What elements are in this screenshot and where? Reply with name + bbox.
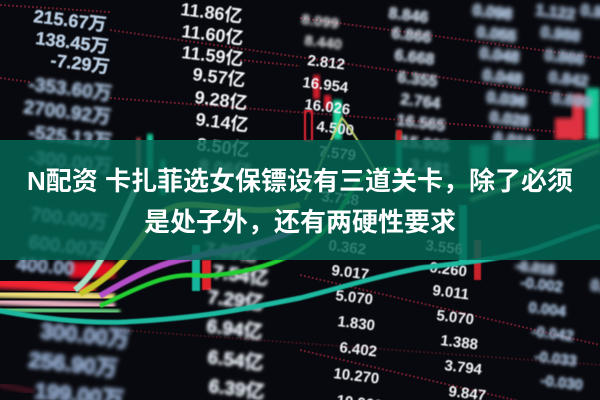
fifth blurred column: 0.048 <box>479 45 520 67</box>
third number column: 9.017 <box>331 262 370 284</box>
lower middle number column: 6.54亿 <box>206 346 265 375</box>
lower left thick numbers: 256.90万 <box>27 347 119 381</box>
middle number column: 9.28亿 <box>194 87 249 113</box>
lower left thick numbers: 300.00万 <box>39 318 131 352</box>
left blurred number column: 2700.92万 <box>22 97 112 129</box>
fourth number column: 6.866 <box>391 25 432 47</box>
third number column: 16.026 <box>304 96 351 119</box>
fifth column lower <box>520 274 584 394</box>
third number column <box>301 11 383 400</box>
fourth number column: 6.668 <box>394 47 435 69</box>
sixth blurred column: 0.842 <box>548 69 589 91</box>
left blurred number column: -300.00万 <box>27 147 113 178</box>
fourth number column lower: 3.794 <box>444 357 483 379</box>
left blurred number column: 400.00 <box>16 254 75 280</box>
left number column: 138.45万 <box>35 28 109 57</box>
middle number column: 8.06亿 <box>198 156 253 182</box>
fifth blurred column: 0.048 <box>482 67 523 89</box>
fourth number column: 15.905 <box>400 133 450 156</box>
fifth column lower: -0.030 <box>540 372 584 394</box>
third number column: 5.070 <box>335 287 374 309</box>
lower middle number column: 7.54亿 <box>211 261 270 290</box>
left blurred number column: 700.00万 <box>29 204 109 234</box>
fourth number column: 3.681 <box>410 157 451 179</box>
middle number column: 7.89亿 <box>204 239 259 265</box>
fifth blurred column: 0.098 <box>472 2 513 24</box>
title band <box>0 140 600 260</box>
fifth column lower: 0.004 <box>528 299 567 321</box>
fifth column lower: -0.002 <box>520 274 564 296</box>
middle number column: 11.60亿 <box>181 21 245 49</box>
fourth number column: 6.355 <box>397 69 438 91</box>
fourth number column <box>388 5 451 179</box>
fourth number column lower: 5.070 <box>436 307 475 329</box>
fourth number column lower: 3.556 <box>425 237 464 259</box>
candlestick bars <box>70 75 600 291</box>
sixth blurred column <box>535 2 600 297</box>
fourth number column: 8.846 <box>388 5 429 27</box>
fifth blurred column: 0.055 <box>476 24 517 46</box>
fourth number column: 2.764 <box>400 91 441 113</box>
headline text: N配资 卡扎菲选女保镖设有三道关卡，除了必须是处子外，还有两硬性要求 <box>27 166 573 237</box>
left blurred number column <box>16 74 113 280</box>
fourth number column: 16.565 <box>396 112 446 135</box>
fifth column lower: -0.042 <box>531 323 575 345</box>
lower middle number column: 6.94亿 <box>205 315 264 344</box>
fourth number column lower: 1.388 <box>440 332 479 354</box>
left blurred number column: -353.60万 <box>27 74 113 105</box>
left number column: -7.29万 <box>50 50 111 77</box>
third number column: 8.440 <box>304 32 343 54</box>
fifth blurred column <box>472 2 556 278</box>
third number column: 10.270 <box>333 365 380 388</box>
middle number column: 9.57亿 <box>192 64 247 90</box>
fifth blurred column: 0.028 <box>489 109 530 131</box>
third number column: 16.954 <box>302 74 350 97</box>
third number column: 1.830 <box>337 313 376 335</box>
lower middle number column <box>205 261 270 400</box>
fourth number column lower: 0.260 <box>429 259 468 281</box>
third number column: 6.402 <box>339 339 378 361</box>
left blurred number column: -525.13万 <box>27 122 113 153</box>
third number column: 4.500 <box>316 118 355 140</box>
fifth blurred column: 0.018 <box>493 130 534 152</box>
sixth blurred column: 0.866 <box>544 47 585 69</box>
left blurred number column: 600.00万 <box>27 232 107 262</box>
fifth column lower: -0.033 <box>534 348 578 370</box>
third number column: 8.099 <box>301 11 340 33</box>
middle number column: 11.59亿 <box>181 42 245 70</box>
third number column: 3.738 <box>321 188 360 210</box>
left number column: 215.67万 <box>33 6 107 35</box>
left number column <box>33 6 111 77</box>
third number column: 7.579 <box>318 143 357 165</box>
fourth number column lower <box>425 237 487 400</box>
fifth blurred column: -0.015 <box>515 257 556 278</box>
sixth blurred column: 1.122 <box>535 2 576 24</box>
fourth number column lower: 9.011 <box>432 282 470 303</box>
middle number column: 9.14亿 <box>195 109 250 135</box>
third number column: 2.812 <box>307 52 346 74</box>
sixth blurred column: 0.699 <box>551 90 592 112</box>
third number column: 0.362 <box>328 237 367 259</box>
sixth blurred column: 0.988 <box>540 24 581 46</box>
fifth blurred column: 0.036 <box>486 89 527 111</box>
moving average line chart <box>0 118 600 322</box>
lower left thick numbers <box>27 318 131 400</box>
lower middle number column: 7.29亿 <box>206 286 265 315</box>
middle number column <box>180 0 259 265</box>
middle number column: 8.50亿 <box>196 134 251 160</box>
